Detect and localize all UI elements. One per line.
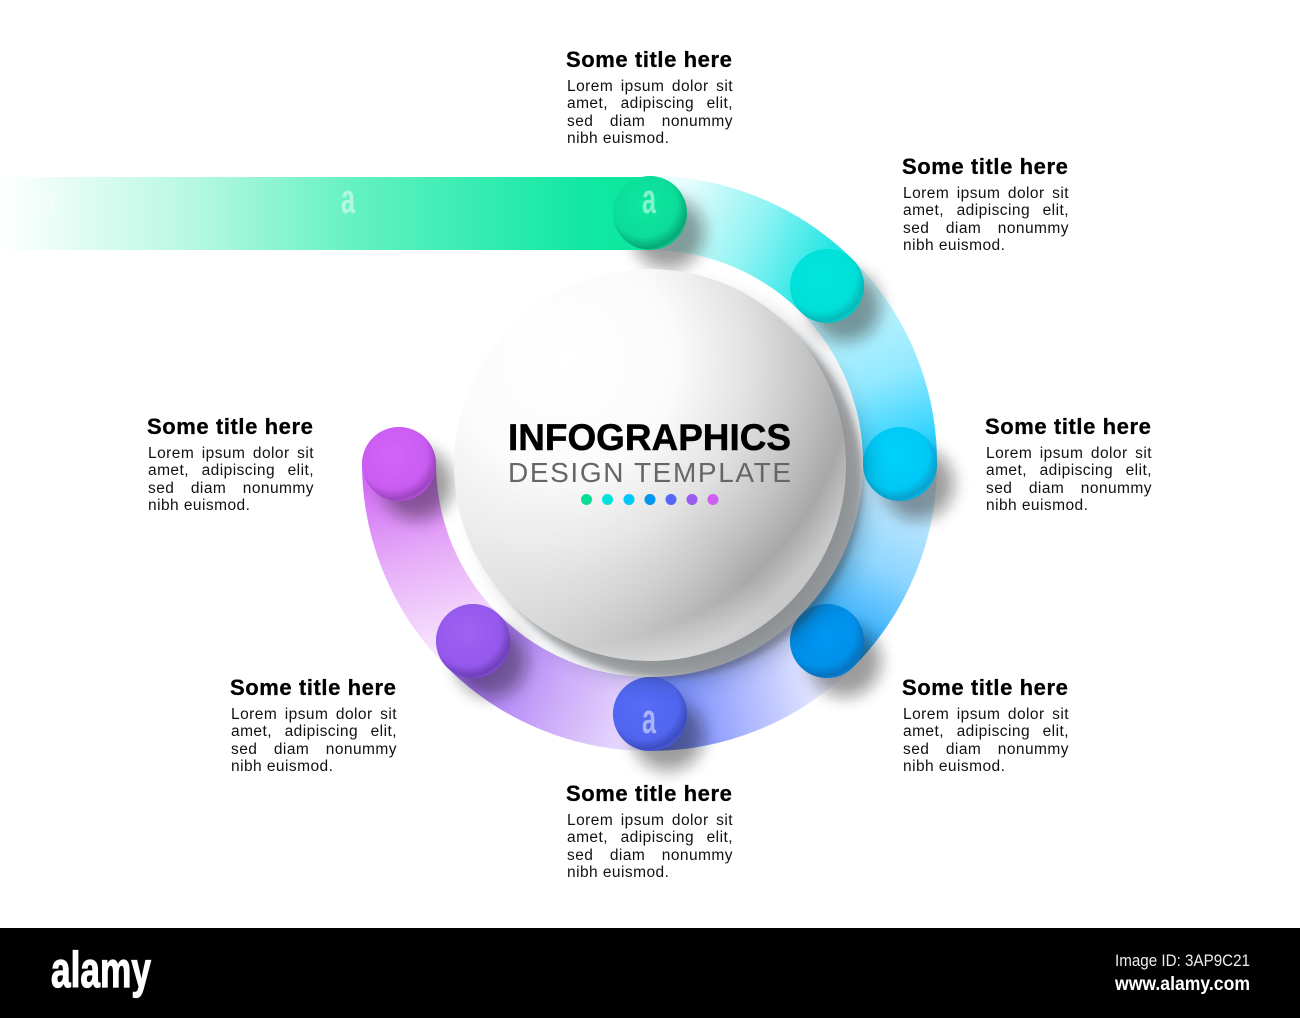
watermark glyphs: a	[41, 175, 55, 222]
footer bar: Image ID: 3AP9C21	[1115, 951, 1250, 970]
text block: left: sed diam nonummy	[148, 480, 314, 497]
segment 6: magenta arc with ball	[362, 427, 473, 641]
text block: upper right: amet, adipiscing elit,	[903, 202, 1069, 219]
text block: left: nibh euismod.	[148, 497, 250, 514]
text block: top: Lorem ipsum dolor sit	[567, 78, 733, 95]
text block: top	[566, 47, 733, 147]
text block: top: amet, adipiscing elit,	[567, 95, 733, 112]
watermark glyphs: a	[341, 175, 355, 222]
green starting band with ball	[0, 176, 704, 269]
text block: upper right: nibh euismod.	[903, 237, 1005, 254]
text block: bottom: Some title here	[566, 781, 732, 806]
text block: right: nibh euismod.	[986, 497, 1088, 514]
segment 4: indigo arc with ball	[613, 641, 827, 771]
text block: bottom	[566, 781, 733, 881]
colored dots row	[581, 494, 718, 505]
watermark glyphs: a	[642, 695, 656, 742]
text block: lower left: nibh euismod.	[231, 758, 333, 775]
text block: lower left: Some title here	[230, 675, 396, 700]
segment 1: cyan arc with ball	[650, 213, 881, 342]
text block: bottom: sed diam nonummy	[567, 847, 733, 864]
text block: lower left	[230, 675, 397, 775]
text block: lower right: nibh euismod.	[903, 758, 1005, 775]
text block: right	[985, 414, 1152, 514]
text block: upper right: Some title here	[902, 154, 1068, 179]
text block: lower left: amet, adipiscing elit,	[231, 723, 397, 740]
subheading: DESIGN TEMPLATE: DESIGN TEMPLATE	[508, 457, 791, 488]
text block: top: Some title here	[566, 47, 732, 72]
text block: lower left: sed diam nonummy	[231, 741, 397, 758]
text block: bottom: nibh euismod.	[567, 864, 669, 881]
text block: top: sed diam nonummy	[567, 113, 733, 130]
text block: left: Some title here	[147, 414, 313, 439]
text block: bottom: amet, adipiscing elit,	[567, 829, 733, 846]
segment 3: blue arc with ball	[790, 464, 900, 697]
segment 5: purple arc with ball	[436, 604, 650, 714]
watermark glyphs	[41, 175, 656, 742]
footer bar: www.alamy.com	[1114, 974, 1250, 995]
heading: INFOGRAPHICS: INFOGRAPHICS	[508, 417, 791, 458]
text block: left: amet, adipiscing elit,	[148, 462, 314, 479]
text block: bottom: Lorem ipsum dolor sit	[567, 812, 733, 829]
text block: lower right	[902, 675, 1069, 775]
footer bar: alamy	[51, 942, 151, 998]
text block: lower right: Lorem ipsum dolor sit	[903, 706, 1069, 723]
text block: right: Lorem ipsum dolor sit	[986, 445, 1152, 462]
text block: upper right: sed diam nonummy	[903, 220, 1069, 237]
text block: upper right	[902, 154, 1069, 254]
text block: right: Some title here	[985, 414, 1151, 439]
footer bar	[0, 928, 1300, 1018]
text block: left	[147, 414, 314, 514]
text block: upper right: Lorem ipsum dolor sit	[903, 185, 1069, 202]
text block: right: sed diam nonummy	[986, 480, 1152, 497]
text block: lower right: amet, adipiscing elit,	[903, 723, 1069, 740]
text block: lower right: sed diam nonummy	[903, 741, 1069, 758]
text block: top: nibh euismod.	[567, 130, 669, 147]
text block: lower right: Some title here	[902, 675, 1068, 700]
text block: lower left: Lorem ipsum dolor sit	[231, 706, 397, 723]
central sphere with shadow	[454, 269, 866, 680]
text block: left: Lorem ipsum dolor sit	[148, 445, 314, 462]
segment 2: sky arc with ball	[827, 286, 954, 520]
text block: right: amet, adipiscing elit,	[986, 462, 1152, 479]
watermark glyphs: a	[642, 175, 656, 222]
